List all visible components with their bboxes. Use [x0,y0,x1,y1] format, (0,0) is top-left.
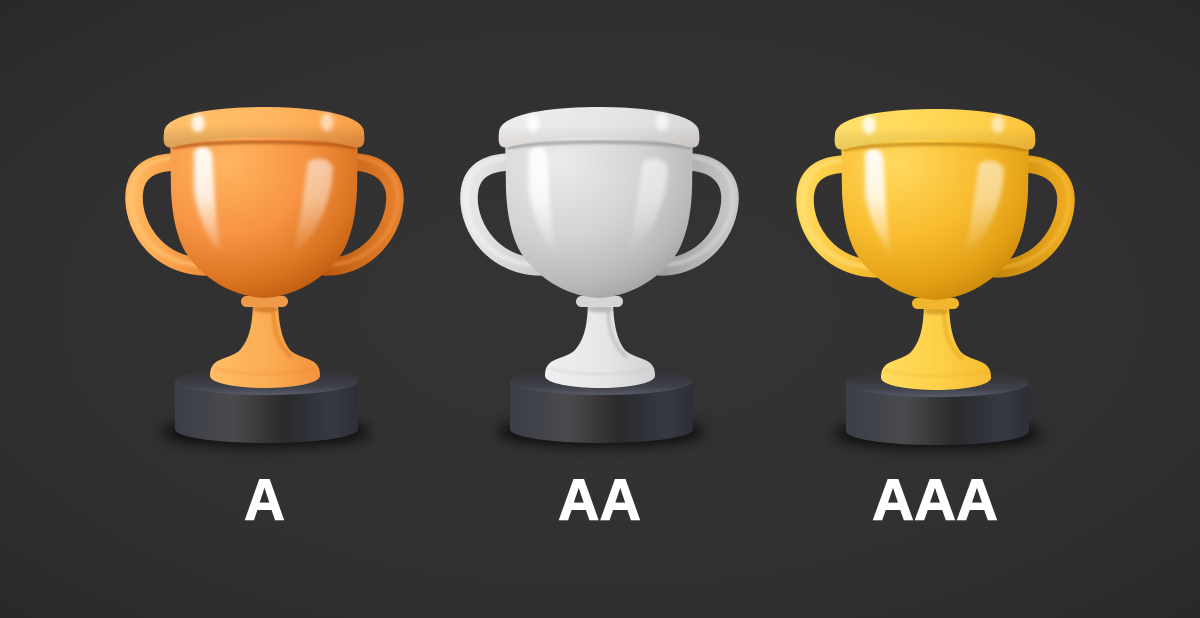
cup highlight left [194,147,222,256]
cup body [505,128,693,298]
left handle [466,158,543,267]
label: A: A [244,468,285,533]
cup highlight left [865,149,893,258]
cup body [170,128,358,298]
plinth shadow [833,420,1041,448]
trophy: gold [802,109,1069,448]
rim [164,107,364,148]
right handle [325,157,398,267]
rim [835,109,1035,150]
plinth [846,369,1029,445]
cup highlight right [292,159,333,256]
rim shadow [507,142,691,148]
cup highlight right [627,159,668,256]
plinth shadow [162,418,370,446]
trophy: bronze [131,107,398,446]
cup body [841,130,1029,300]
rim shadow [172,142,356,148]
right handle [660,157,733,267]
foot and stem [545,305,655,388]
plinth [175,367,358,443]
collar [576,296,623,307]
collar [241,296,288,307]
right handle [996,159,1069,269]
left handle [131,158,208,267]
label: AAA: AAA [872,468,998,533]
label: AA: AA [558,468,641,533]
collar [912,298,959,309]
cup highlight left [529,147,557,256]
plinth [510,367,693,443]
cup highlight right [963,161,1004,258]
trophy: silver [466,107,733,446]
rim [499,107,699,148]
rim shadow [843,144,1027,150]
left handle [802,160,879,269]
foot and stem [210,305,320,388]
plinth shadow [497,418,705,446]
foot and stem [881,307,991,390]
